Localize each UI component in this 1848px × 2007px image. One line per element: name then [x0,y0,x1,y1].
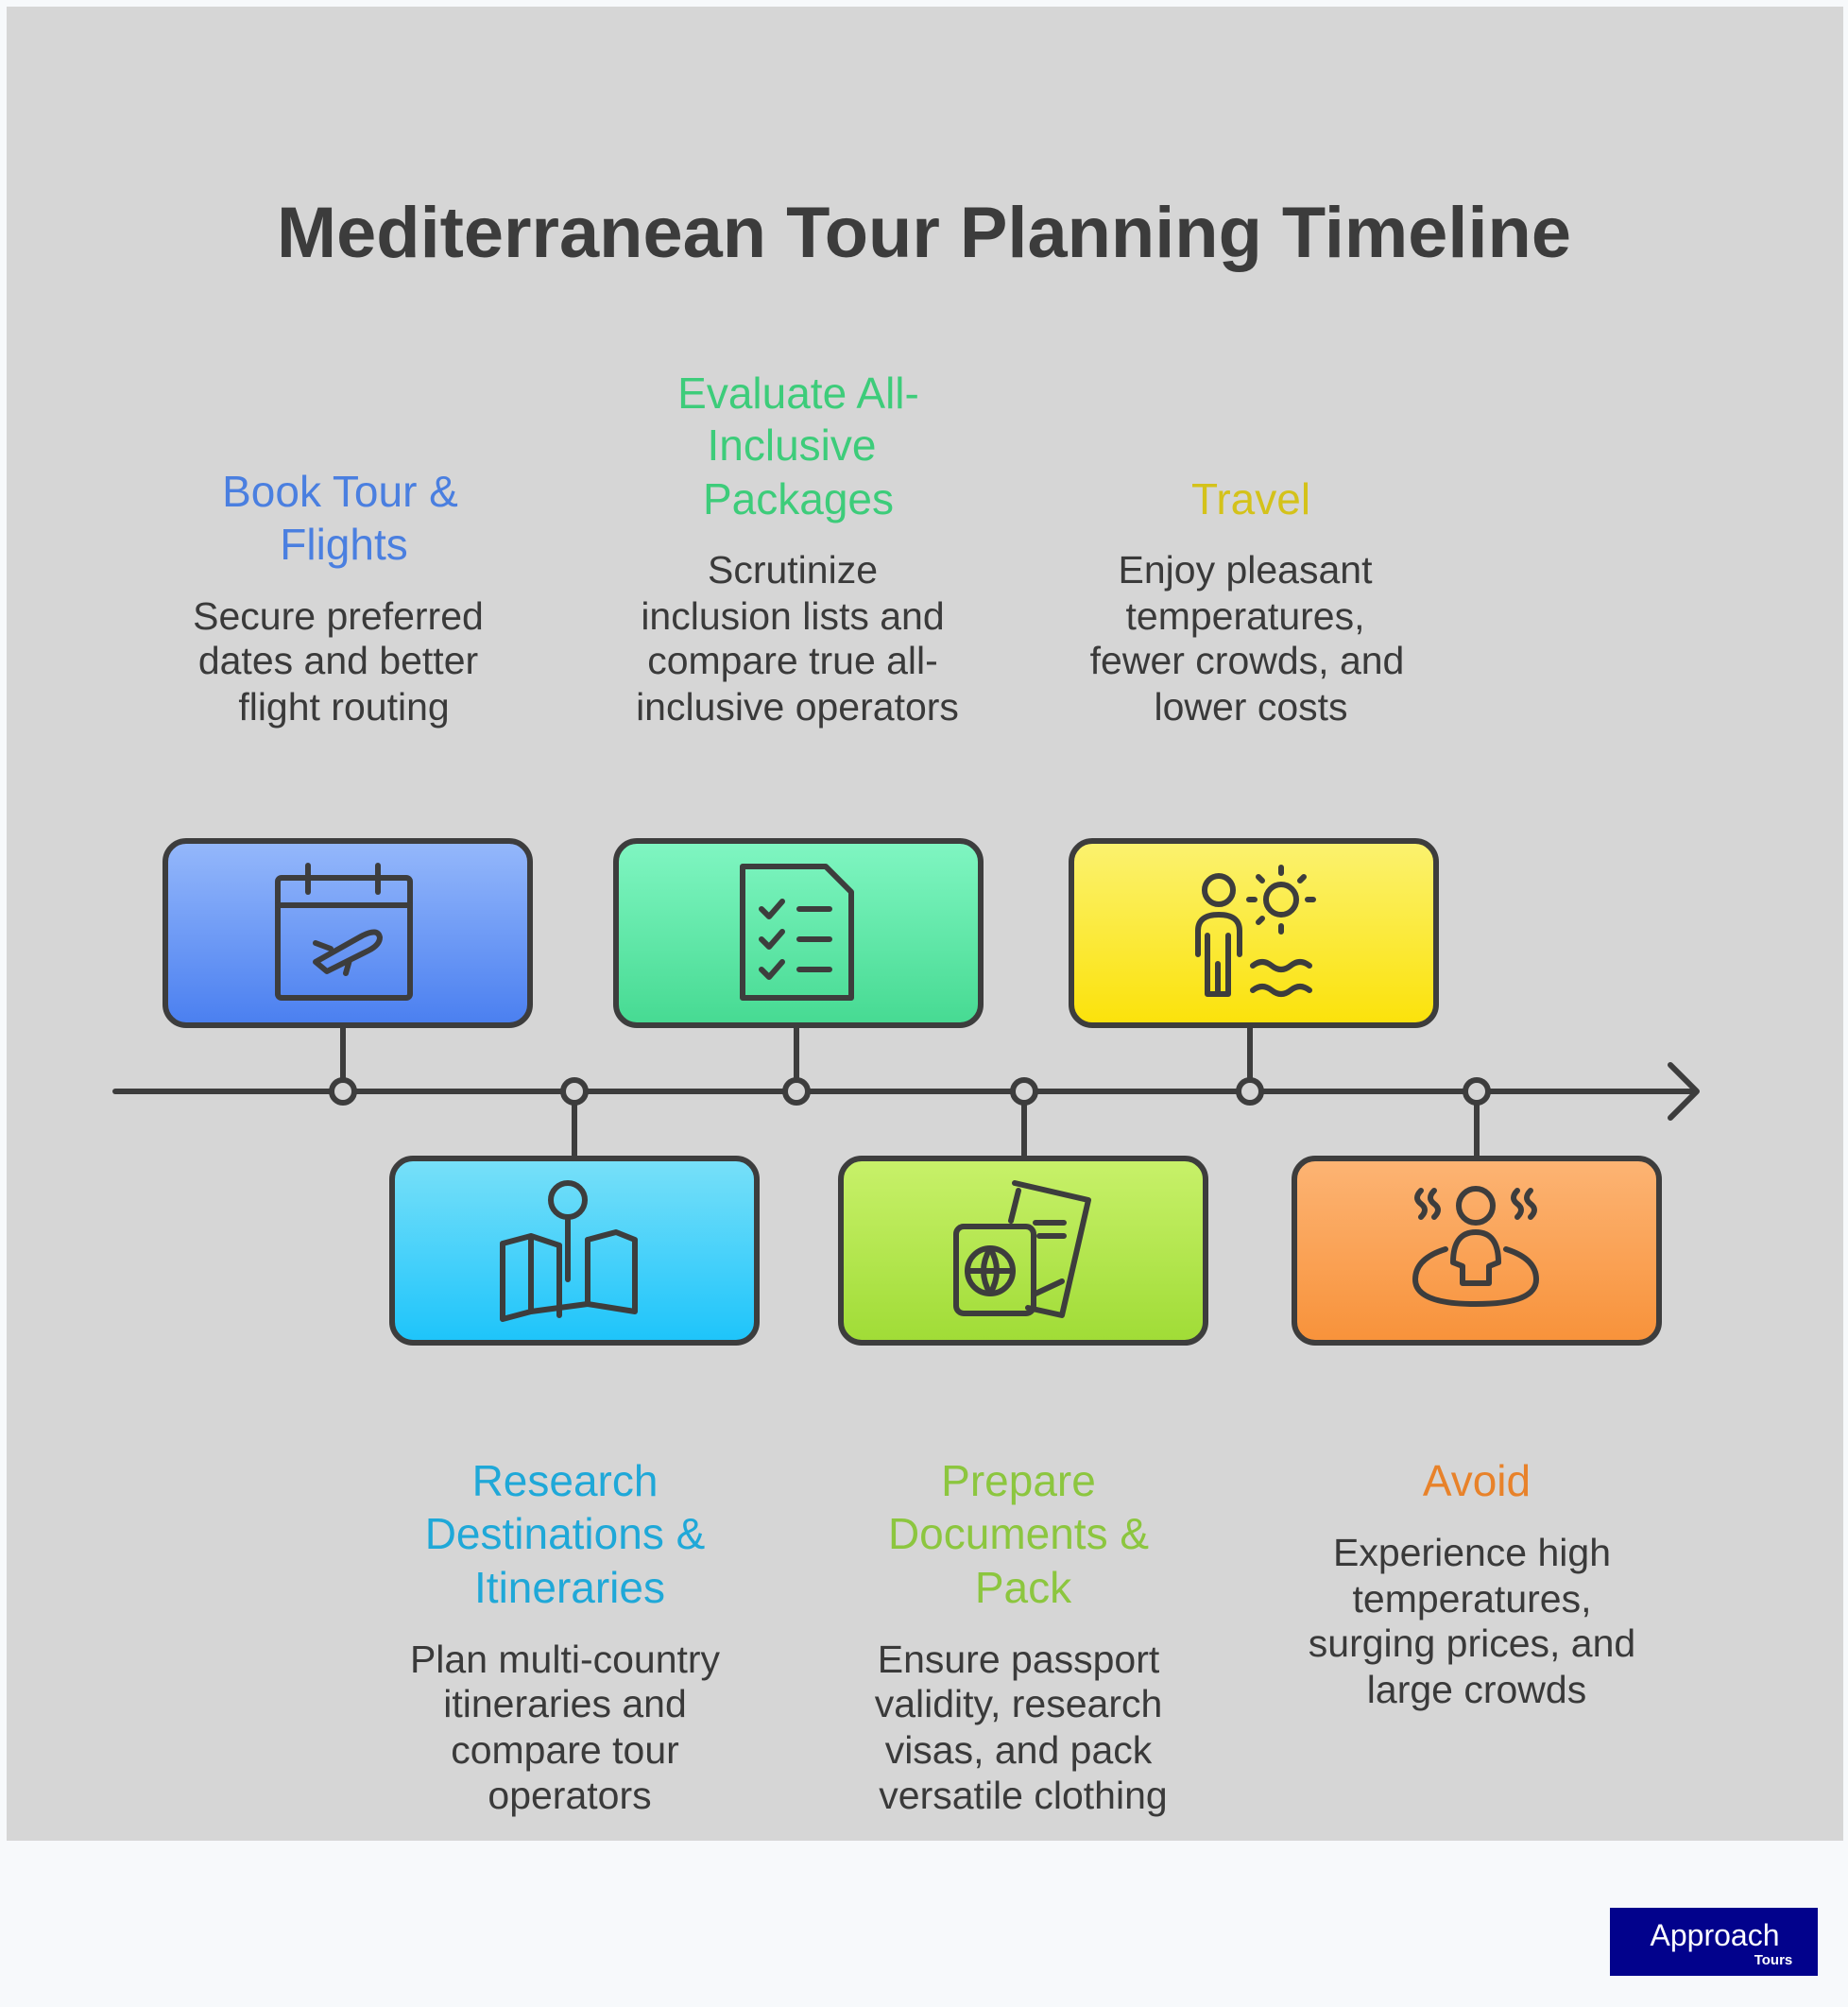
text: travel: Travel [1191,474,1310,523]
text: evaluate: inclusion lists and [641,594,945,638]
text: prepare [875,1456,1168,1817]
text: book tour: Flights [280,520,408,569]
text: research: Research [472,1456,658,1505]
text: travel: Enjoy pleasant [1119,548,1373,592]
text: avoid [1309,1456,1635,1711]
text: prepare: validity, research [875,1682,1162,1725]
text: prepare: Ensure passport [878,1638,1160,1681]
text: avoid: Experience high [1333,1531,1611,1574]
connectors and nodes [332,1025,1488,1158]
text: prepare: Prepare [941,1456,1096,1505]
text: travel: fewer crowds, and [1090,639,1404,682]
text: evaluate: Inclusive [708,420,876,470]
text: prepare: Pack [975,1563,1072,1612]
text: research [410,1456,721,1817]
text: research: itineraries and [443,1682,687,1725]
text: book tour [193,467,484,729]
text: book tour: Secure preferred [193,594,484,638]
text: research: compare tour [451,1728,679,1772]
box: research [392,1158,757,1343]
text: avoid: Avoid [1423,1456,1531,1505]
timeline axis [115,1065,1697,1118]
icon: person with sun and waves [1198,867,1313,994]
text: prepare: Documents & [888,1509,1149,1558]
box: evaluate [616,841,981,1025]
box: avoid [1294,1158,1659,1343]
box: travel [1071,841,1436,1025]
text: travel [1090,474,1404,729]
logo: Tours [1754,1952,1792,1968]
text: evaluate: Packages [703,474,894,523]
text: evaluate: compare true all- [647,639,938,682]
text: research: Destinations & [425,1509,705,1558]
text: prepare: visas, and pack [885,1728,1153,1772]
icon: passport and ticket [956,1183,1088,1315]
icon: calendar with plane [278,866,410,998]
text: avoid: temperatures, [1353,1577,1591,1621]
text: travel: lower costs [1154,685,1348,729]
text: research: Itineraries [474,1563,665,1612]
icon: map with pin [503,1183,635,1319]
logo: Approach [1651,1918,1779,1952]
icon: person in heat [1415,1189,1536,1304]
text: book tour: dates and better [198,639,478,682]
text: travel: temperatures, [1126,594,1364,638]
text: evaluate: inclusive operators [636,685,959,729]
logo [1610,1908,1818,1976]
text: research: Plan multi-country [410,1638,721,1681]
text: research: operators [488,1774,652,1817]
box: book tour [165,841,530,1025]
icon: checklist [743,866,851,998]
text: prepare: versatile clothing [879,1774,1168,1817]
text: book tour: Book Tour & [222,467,458,516]
text: evaluate: Evaluate All- [677,369,919,418]
text: avoid: large crowds [1367,1668,1586,1711]
text: evaluate [636,369,959,729]
text: book tour: flight routing [238,685,450,729]
title: Mediterranean Tour Planning Timeline [277,193,1571,273]
text: avoid: surging prices, and [1309,1621,1635,1665]
box: prepare [841,1158,1206,1343]
text: evaluate: Scrutinize [708,548,878,592]
